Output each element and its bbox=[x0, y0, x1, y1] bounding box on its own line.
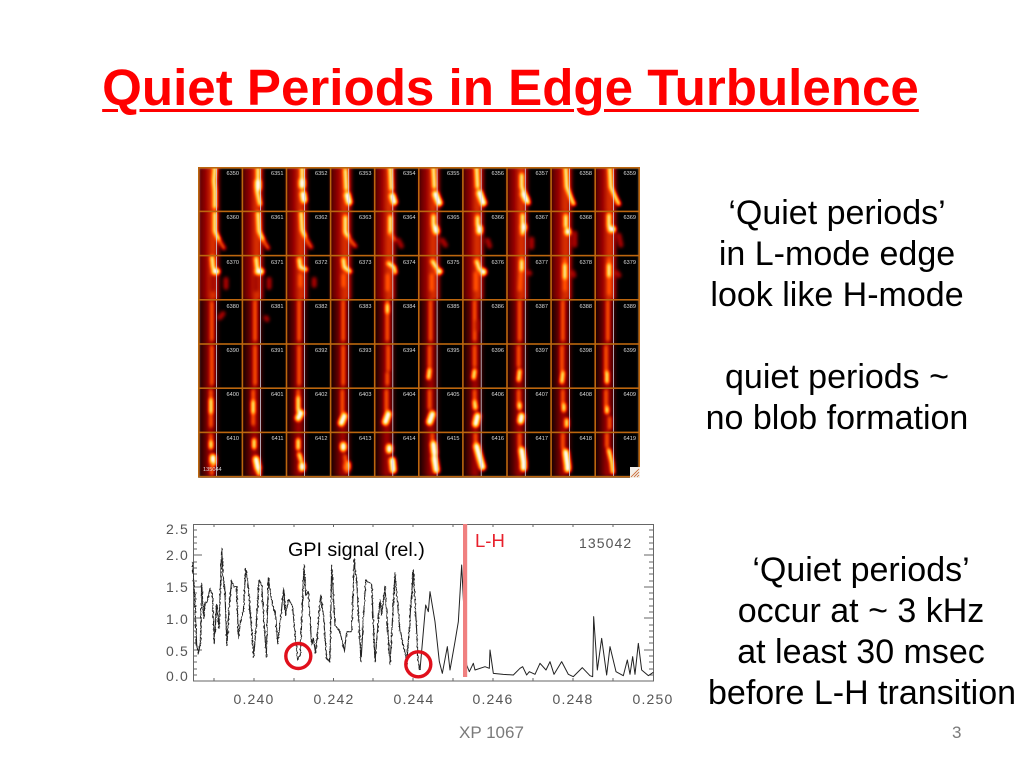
frame numbers: 6364 bbox=[403, 215, 416, 221]
text block: quiet periods timing bbox=[708, 551, 1016, 712]
frame numbers: 6396 bbox=[492, 348, 504, 354]
frame numbers: 6383 bbox=[359, 304, 372, 310]
frame numbers: 6401 bbox=[271, 392, 284, 398]
frame numbers: 6367 bbox=[536, 215, 548, 221]
L-H label: L-H bbox=[475, 530, 505, 551]
x axis labels: 0.248 bbox=[552, 691, 594, 707]
footer text: XP 1067 bbox=[459, 723, 524, 742]
frame numbers: 6354 bbox=[403, 171, 416, 177]
frame numbers: 6389 bbox=[624, 304, 636, 310]
frame numbers: 6416 bbox=[492, 436, 504, 442]
frame numbers: 6370 bbox=[227, 260, 239, 266]
frame numbers: 6351 bbox=[271, 171, 284, 177]
frame numbers: 6377 bbox=[536, 260, 548, 266]
frame numbers: 6399 bbox=[624, 348, 636, 354]
frame numbers: 6382 bbox=[315, 304, 328, 310]
x axis labels bbox=[233, 691, 674, 707]
y axis labels: 2.5 bbox=[166, 521, 189, 537]
frame numbers: 6381 bbox=[271, 304, 284, 310]
frame numbers: 6394 bbox=[403, 348, 416, 354]
image panel: grid of camera frames bbox=[198, 167, 640, 478]
signal trace after the transition bbox=[420, 565, 653, 677]
L-H transition bar bbox=[463, 524, 467, 677]
frame numbers: 6406 bbox=[492, 392, 504, 398]
frame numbers: 6375 bbox=[447, 260, 460, 266]
frame numbers: 6369 bbox=[624, 215, 636, 221]
frame numbers: 6388 bbox=[580, 304, 592, 310]
frame numbers: 6378 bbox=[580, 260, 592, 266]
y axis labels: 1.0 bbox=[166, 611, 189, 627]
frame numbers: 6407 bbox=[536, 392, 548, 398]
frame numbers: 6372 bbox=[315, 260, 328, 266]
frame numbers: 6387 bbox=[536, 304, 548, 310]
frame numbers: 6413 bbox=[359, 436, 372, 442]
frame numbers: 6405 bbox=[447, 392, 460, 398]
frame numbers: 6374 bbox=[403, 260, 416, 266]
frame numbers: 6373 bbox=[359, 260, 372, 266]
frame numbers: 6384 bbox=[403, 304, 416, 310]
frame numbers: 6386 bbox=[492, 304, 504, 310]
frame numbers: 6418 bbox=[580, 436, 592, 442]
frame numbers: 6403 bbox=[359, 392, 372, 398]
corner mark bbox=[630, 467, 640, 478]
chart: GPI signal time trace bbox=[166, 521, 674, 707]
frame numbers: 6411 bbox=[271, 436, 284, 442]
y axis labels: 0.0 bbox=[166, 668, 189, 684]
signal trace before the transition bbox=[192, 548, 420, 670]
pale vertical reference lines bbox=[216, 167, 614, 477]
x axis labels: 0.242 bbox=[313, 691, 355, 707]
frame numbers: 6397 bbox=[536, 348, 548, 354]
frame numbers: 6412 bbox=[315, 436, 328, 442]
frame numbers: 6356 bbox=[492, 171, 504, 177]
frame numbers: 6368 bbox=[580, 215, 592, 221]
text block: quiet periods look like H-mode: in L-mode edge bbox=[719, 235, 955, 273]
frame numbers: 6417 bbox=[536, 436, 548, 442]
text block: quiet periods timing: at least 30 msec bbox=[737, 633, 985, 671]
frame numbers: 6415 bbox=[447, 436, 460, 442]
text block: quiet periods look like H-mode bbox=[706, 194, 968, 437]
frame numbers: 6409 bbox=[624, 392, 636, 398]
frame numbers: 6358 bbox=[580, 171, 592, 177]
text block: quiet periods timing: before L-H transition bbox=[708, 674, 1016, 712]
frame numbers: 6353 bbox=[359, 171, 372, 177]
frame numbers: 6391 bbox=[271, 348, 284, 354]
x axis labels: 0.244 bbox=[393, 691, 435, 707]
frame numbers: 6366 bbox=[492, 215, 504, 221]
frame numbers: 6390 bbox=[227, 348, 239, 354]
frame numbers: 6414 bbox=[403, 436, 416, 442]
frame numbers: 6398 bbox=[580, 348, 592, 354]
circled quiet period 1 bbox=[286, 644, 311, 668]
frame numbers: 6371 bbox=[271, 260, 284, 266]
text block: quiet periods timing: occur at ~ 3 kHz bbox=[738, 592, 984, 630]
frame numbers: 6359 bbox=[624, 171, 636, 177]
frame numbers: 6408 bbox=[580, 392, 592, 398]
title: Quiet Periods in Edge Turbulence bbox=[102, 59, 919, 116]
orange frame grid bbox=[198, 167, 640, 478]
frame numbers: 6392 bbox=[315, 348, 328, 354]
shot number: 135044 bbox=[203, 467, 222, 473]
frame numbers: 6355 bbox=[447, 171, 460, 177]
plot frame and ticks bbox=[193, 524, 654, 681]
text block: quiet periods look like H-mode: ‘Quiet periods’ bbox=[728, 194, 946, 232]
x axis labels: 0.246 bbox=[472, 691, 514, 707]
frame numbers: 6393 bbox=[359, 348, 372, 354]
x axis labels: 0.240 bbox=[233, 691, 275, 707]
y axis labels: 0.5 bbox=[166, 643, 189, 659]
frame numbers: 6379 bbox=[624, 260, 636, 266]
frame numbers: 6419 bbox=[624, 436, 636, 442]
frame numbers: 6362 bbox=[315, 215, 328, 221]
frame numbers: 6402 bbox=[315, 392, 328, 398]
x axis labels: 0.250 bbox=[632, 691, 674, 707]
frame numbers: 6376 bbox=[492, 260, 504, 266]
frame numbers: 6361 bbox=[271, 215, 284, 221]
text block: quiet periods look like H-mode: look like H-mode bbox=[710, 276, 964, 314]
frame numbers: 6380 bbox=[227, 304, 239, 310]
frame numbers bbox=[227, 171, 636, 442]
frame numbers: 6404 bbox=[403, 392, 416, 398]
frame numbers: 6352 bbox=[315, 171, 328, 177]
text block: quiet periods look like H-mode: quiet periods ~ bbox=[725, 358, 949, 396]
frame numbers: 6385 bbox=[447, 304, 460, 310]
plot label: GPI signal: GPI signal (rel.) bbox=[288, 539, 425, 561]
circled quiet period 2 bbox=[406, 652, 431, 677]
frame numbers: 6357 bbox=[536, 171, 548, 177]
y axis labels: 1.5 bbox=[166, 579, 189, 595]
frame numbers: 6400 bbox=[227, 392, 239, 398]
text block: quiet periods look like H-mode: no blob formation bbox=[706, 399, 968, 437]
y axis labels: 2.0 bbox=[166, 547, 189, 563]
frame numbers: 6363 bbox=[359, 215, 372, 221]
page number: 3 bbox=[952, 723, 961, 742]
y axis labels bbox=[166, 521, 189, 684]
frame numbers: 6350 bbox=[227, 171, 239, 177]
shot number label: 135042 bbox=[579, 535, 632, 551]
frame numbers: 6395 bbox=[447, 348, 460, 354]
text block: quiet periods timing: ‘Quiet periods’ bbox=[752, 551, 970, 589]
frame numbers: 6365 bbox=[447, 215, 460, 221]
frame numbers: 6410 bbox=[227, 436, 239, 442]
frame numbers: 6360 bbox=[227, 215, 239, 221]
